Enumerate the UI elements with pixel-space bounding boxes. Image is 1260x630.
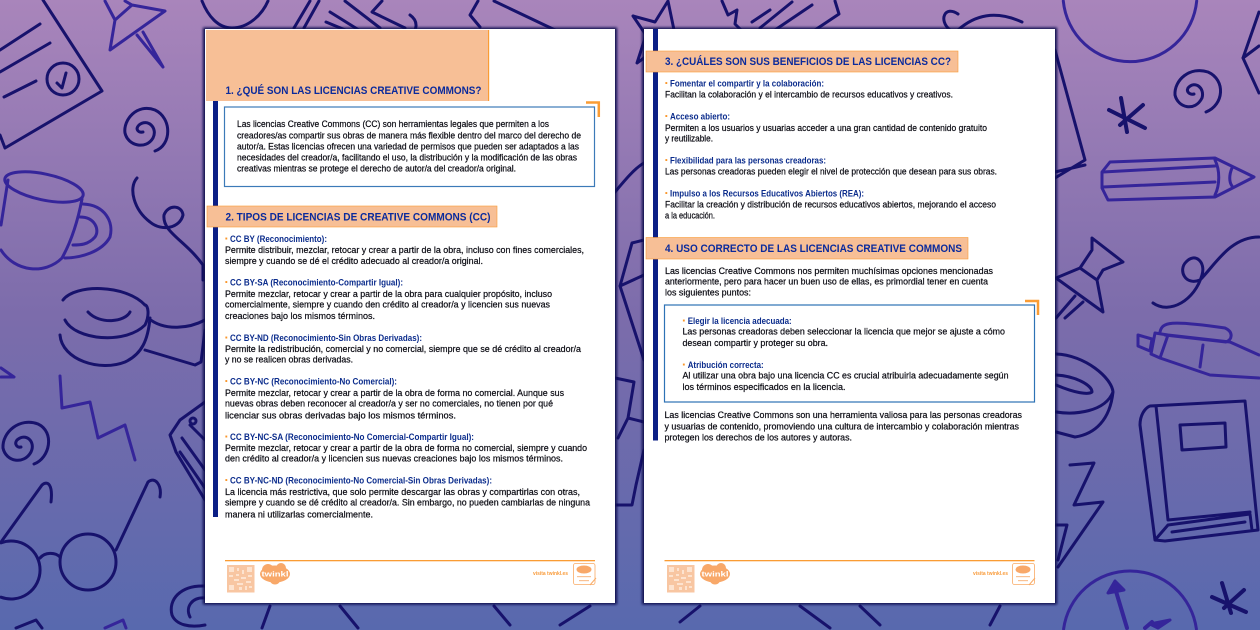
blue side bar: [653, 29, 658, 440]
intro text section 4: Las licencias Creative Commons nos permiten muchísimas opciones mencionadas: [665, 266, 994, 276]
page 2 shadow: [642, 28, 1057, 604]
icon: QR code: [227, 565, 254, 592]
license: CC BY-NC: ·: [224, 374, 229, 388]
benefit: flexibilidad: ·: [664, 152, 669, 168]
benefit: impulso REA: Facilitar la creación y distribución de recursos educativos abiertos, mejorando el acceso: [665, 200, 996, 210]
closing paragraph: [664, 410, 1023, 442]
icon: top strip shapes: [202, 1, 1022, 63]
icon: bottom strip strokes: [262, 606, 1000, 628]
callout: usage tips box: ·: [682, 313, 686, 328]
callout: definition box: Las licencias Creative Commons (CC) son herramientas legales que permiten a los: [237, 119, 550, 129]
icon: guitar shape: [170, 402, 205, 500]
icon: quality badge: [574, 564, 596, 585]
callout: usage tips box: Las personas creadoras deben seleccionar la licencia que mejor se ajuste a cómo: [682, 326, 1005, 336]
callout: usage tips box: Al utilizar una obra bajo una licencia CC es crucial atribuirla adecuadamente según: [682, 370, 1009, 380]
license: CC BY-NC-SA: ·: [224, 429, 229, 444]
intro text section 4: anteriormente, pero para hacer un buen uso de ellas, es primordial tener en cuenta: [665, 276, 988, 286]
license: CC BY-SA: comercialmente, siempre y cuando den crédito al creador/a y licencien sus nuevas: [225, 300, 551, 310]
benefit: impulso REA: [664, 186, 996, 220]
benefit: compartir: Facilitan la colaboración y el intercambio de recursos educativos y creativos.: [665, 90, 953, 100]
license: CC BY-SA: Permite mezclar, retocar y crear a partir de la obra para cualquier propósito, incluso: [225, 289, 552, 299]
icon: twinkl logo: [260, 563, 290, 584]
heading 4: 4. USO CORRECTO DE LAS LICENCIAS CREATIVE COMMONS: [665, 243, 962, 255]
license: CC BY-NC-ND: CC BY-NC-ND (Reconocimiento-No Comercial-Sin Obras Derivadas):: [230, 476, 492, 486]
license: CC BY-SA: CC BY-SA (Reconocimiento-Compartir Igual):: [230, 278, 403, 288]
icon: tape rolls: [60, 289, 205, 366]
icon: gap shapes: [615, 163, 644, 505]
license: CC BY-NC: nuevas obras deben reconocer al creador/a y ser no comerciales, no tienen por qué: [225, 398, 553, 408]
license: CC BY-NC-SA: den crédito al creador/a y licencien sus nuevas creaciones bajo los mismos términos.: [225, 454, 563, 464]
icon: squiggle right: [1153, 237, 1259, 307]
closing paragraph: y usuarias de contenido, promoviendo una cultura de intercambio y colaboración mientras: [664, 422, 1020, 432]
icon: tape right: [1056, 354, 1113, 437]
footer left page: [225, 560, 596, 592]
license: CC BY-NC: [224, 374, 565, 420]
page 1 shadow: [203, 28, 617, 604]
heading 1: [206, 30, 489, 101]
visit link: visita twinkl.es: [533, 571, 568, 577]
icon: circle top right: [1063, 1, 1197, 62]
icon: pen: [1138, 323, 1259, 378]
callout: definition box: autor/a. Estas licencias ofrecen una variedad de permisos que pueden ser adaptados a las: [237, 142, 580, 152]
license: CC BY-SA: [224, 274, 552, 321]
license: CC BY: [224, 231, 584, 266]
license: CC BY: Permite distribuir, mezclar, retocar y crear a partir de la obra, incluso con fines comerciales,: [225, 245, 584, 255]
callout: definition box: [224, 102, 599, 186]
intro text section 4: los siguientes puntos:: [665, 288, 751, 298]
closing paragraph: protegen los derechos de los autores y autoras.: [664, 432, 852, 442]
heading 4: [646, 238, 968, 259]
license: CC BY-ND: [224, 330, 581, 364]
benefit: flexibilidad: Flexibilidad para las personas creadoras:: [670, 156, 826, 166]
icon: twinkl logo: twinkl: [262, 570, 288, 578]
icon: twinkl logo: twinkl: [702, 570, 728, 578]
benefit: compartir: Fomentar el compartir y la colaboración:: [670, 78, 824, 88]
icon: push pin right: [1056, 238, 1123, 318]
heading 3: [646, 51, 958, 72]
license: CC BY: siempre y cuando se dé el crédito adecuado al creador/a original.: [225, 256, 483, 266]
icon: spiral right: [1175, 71, 1221, 112]
license: CC BY-SA: creaciones bajo los mismos términos.: [225, 311, 375, 321]
icon: coffee cup: [1, 166, 111, 269]
license: CC BY-ND: Permite la redistribución, comercial y no comercial, siempre que se dé crédito al creador/a: [225, 344, 581, 354]
icon: star bottom right: [1212, 583, 1246, 613]
icon: QR code: [667, 565, 694, 592]
callout: usage tips box: [664, 301, 1038, 402]
benefit: acceso abierto: Acceso abierto:: [670, 112, 730, 122]
callout: definition box: creadores/as compartir sus obras de manera más flexible dentro del marco del derecho de: [237, 130, 581, 140]
heading 1: 1. ¿QUÉ SON LAS LICENCIAS CREATIVE COMMONS?: [226, 84, 482, 97]
heading 2: 2. TIPOS DE LICENCIAS DE CREATIVE COMMONS (CC): [226, 212, 491, 224]
icon: glasses: [1, 480, 160, 599]
benefit: impulso REA: a la educación.: [665, 210, 715, 220]
icon: spiral left lower: [3, 422, 49, 464]
icon: spiral bottom left: [171, 586, 205, 626]
benefit: flexibilidad: Las personas creadoras pueden elegir el nivel de protección que desean para sus obras.: [665, 166, 997, 176]
license: CC BY-NC: Permite mezclar, retocar y crear a partir de la obra de forma no comercial. Aunque sus: [225, 388, 565, 398]
benefit: impulso REA: ·: [664, 186, 669, 200]
benefit: acceso abierto: [664, 108, 987, 144]
icon: checklist document: [0, 0, 102, 148]
benefit: acceso abierto: Permiten a los usuarios y usuarias acceder a una gran cantidad de contenido gratuito: [665, 123, 987, 133]
icon: star right: [1109, 98, 1145, 132]
callout: definition box: creativas mientras se protege el derecho de autor/a del creador/a original.: [237, 164, 516, 174]
callout: usage tips box: Elegir la licencia adecuada:: [688, 316, 792, 326]
callout: usage tips box: desean compartir y proteger su obra.: [682, 338, 828, 348]
license: CC BY-NC-ND: [224, 472, 590, 520]
blue side bar: [213, 101, 218, 517]
benefit: flexibilidad: [664, 152, 997, 176]
license: CC BY: CC BY (Reconocimiento):: [230, 234, 327, 244]
license: CC BY-NC-ND: manera ni utilizarlas comercialmente.: [225, 510, 373, 520]
icon: bottom triangle purple: [105, 620, 126, 628]
license: CC BY-ND: ·: [224, 330, 229, 345]
icon: pencil: [1102, 158, 1254, 200]
visit link: visita twinkl.es: [973, 571, 1008, 577]
icon: twinkl logo: [700, 563, 730, 584]
footer right page: [664, 560, 1035, 592]
benefit: compartir: ·: [664, 76, 669, 90]
callout: definition box: necesidades del creador/a, facilitando el uso, la distribución y la modificación de las obras: [237, 152, 578, 162]
license: CC BY-NC-SA: [224, 429, 587, 464]
license: CC BY-ND: CC BY-ND (Reconocimiento-Sin Obras Derivadas):: [230, 333, 422, 343]
license: CC BY-NC: CC BY-NC (Reconocimiento-No Comercial):: [230, 376, 397, 386]
benefit: compartir: [664, 76, 953, 100]
icon: squiggle left: [133, 178, 203, 280]
license: CC BY-SA: ·: [224, 274, 229, 290]
panel: right page: [644, 29, 1055, 603]
callout: usage tips box: ·: [682, 357, 686, 372]
callout: usage tips box: Atribución correcta:: [688, 360, 764, 370]
icon: bottom triangles: [16, 620, 42, 628]
license: CC BY: ·: [224, 231, 229, 246]
icon: small triangle: [1, 368, 14, 377]
closing paragraph: Las licencias Creative Commons son una herramienta valiosa para las personas creadoras: [664, 410, 1023, 420]
icon: lightning bolt: [1056, 463, 1103, 567]
heading 3: 3. ¿CUÁLES SON SUS BENEFICIOS DE LAS LICENCIAS CC?: [665, 55, 951, 68]
callout: usage tips box: los términos especificados en la licencia.: [682, 382, 846, 392]
icon: clock: [1064, 571, 1196, 629]
license: CC BY-NC: licenciar sus obras derivadas bajo los mismos términos.: [225, 410, 456, 420]
benefit: acceso abierto: y reutilizable.: [665, 134, 713, 144]
panel: left page: [205, 29, 615, 603]
icon: quality badge: [1012, 564, 1035, 585]
license: CC BY-ND: y no se realicen obras derivadas.: [225, 354, 353, 364]
icon: book corner: [1055, 50, 1085, 178]
benefit: impulso REA: Impulso a los Recursos Educativos Abiertos (REA):: [670, 188, 864, 198]
heading 2: [207, 206, 497, 227]
license: CC BY-NC-SA: Permite mezclar, retocar y crear a partir de la obra de forma no comercial, siempre y cuando: [225, 443, 587, 453]
icon: diamond top right: [1243, 12, 1259, 93]
license: CC BY-NC-ND: La licencia más restrictiva, que solo permite descargar las obras y compartirlas con otras,: [225, 487, 580, 497]
intro text section 4: [665, 266, 994, 298]
license: CC BY-NC-ND: siempre y cuando se dé crédito al creador/a. Sin embargo, no pueden cambiarlas de ninguna: [225, 498, 590, 508]
benefit: acceso abierto: ·: [664, 108, 669, 124]
icon: spiral left: [125, 108, 168, 151]
license: CC BY-NC-ND: ·: [224, 472, 229, 488]
icon: zigzag: [60, 376, 135, 460]
license: CC BY-NC-SA: CC BY-NC-SA (Reconocimiento-No Comercial-Compartir Igual):: [230, 432, 474, 442]
icon: push pin left: [105, 1, 165, 67]
icon: notebook: [1140, 401, 1258, 541]
